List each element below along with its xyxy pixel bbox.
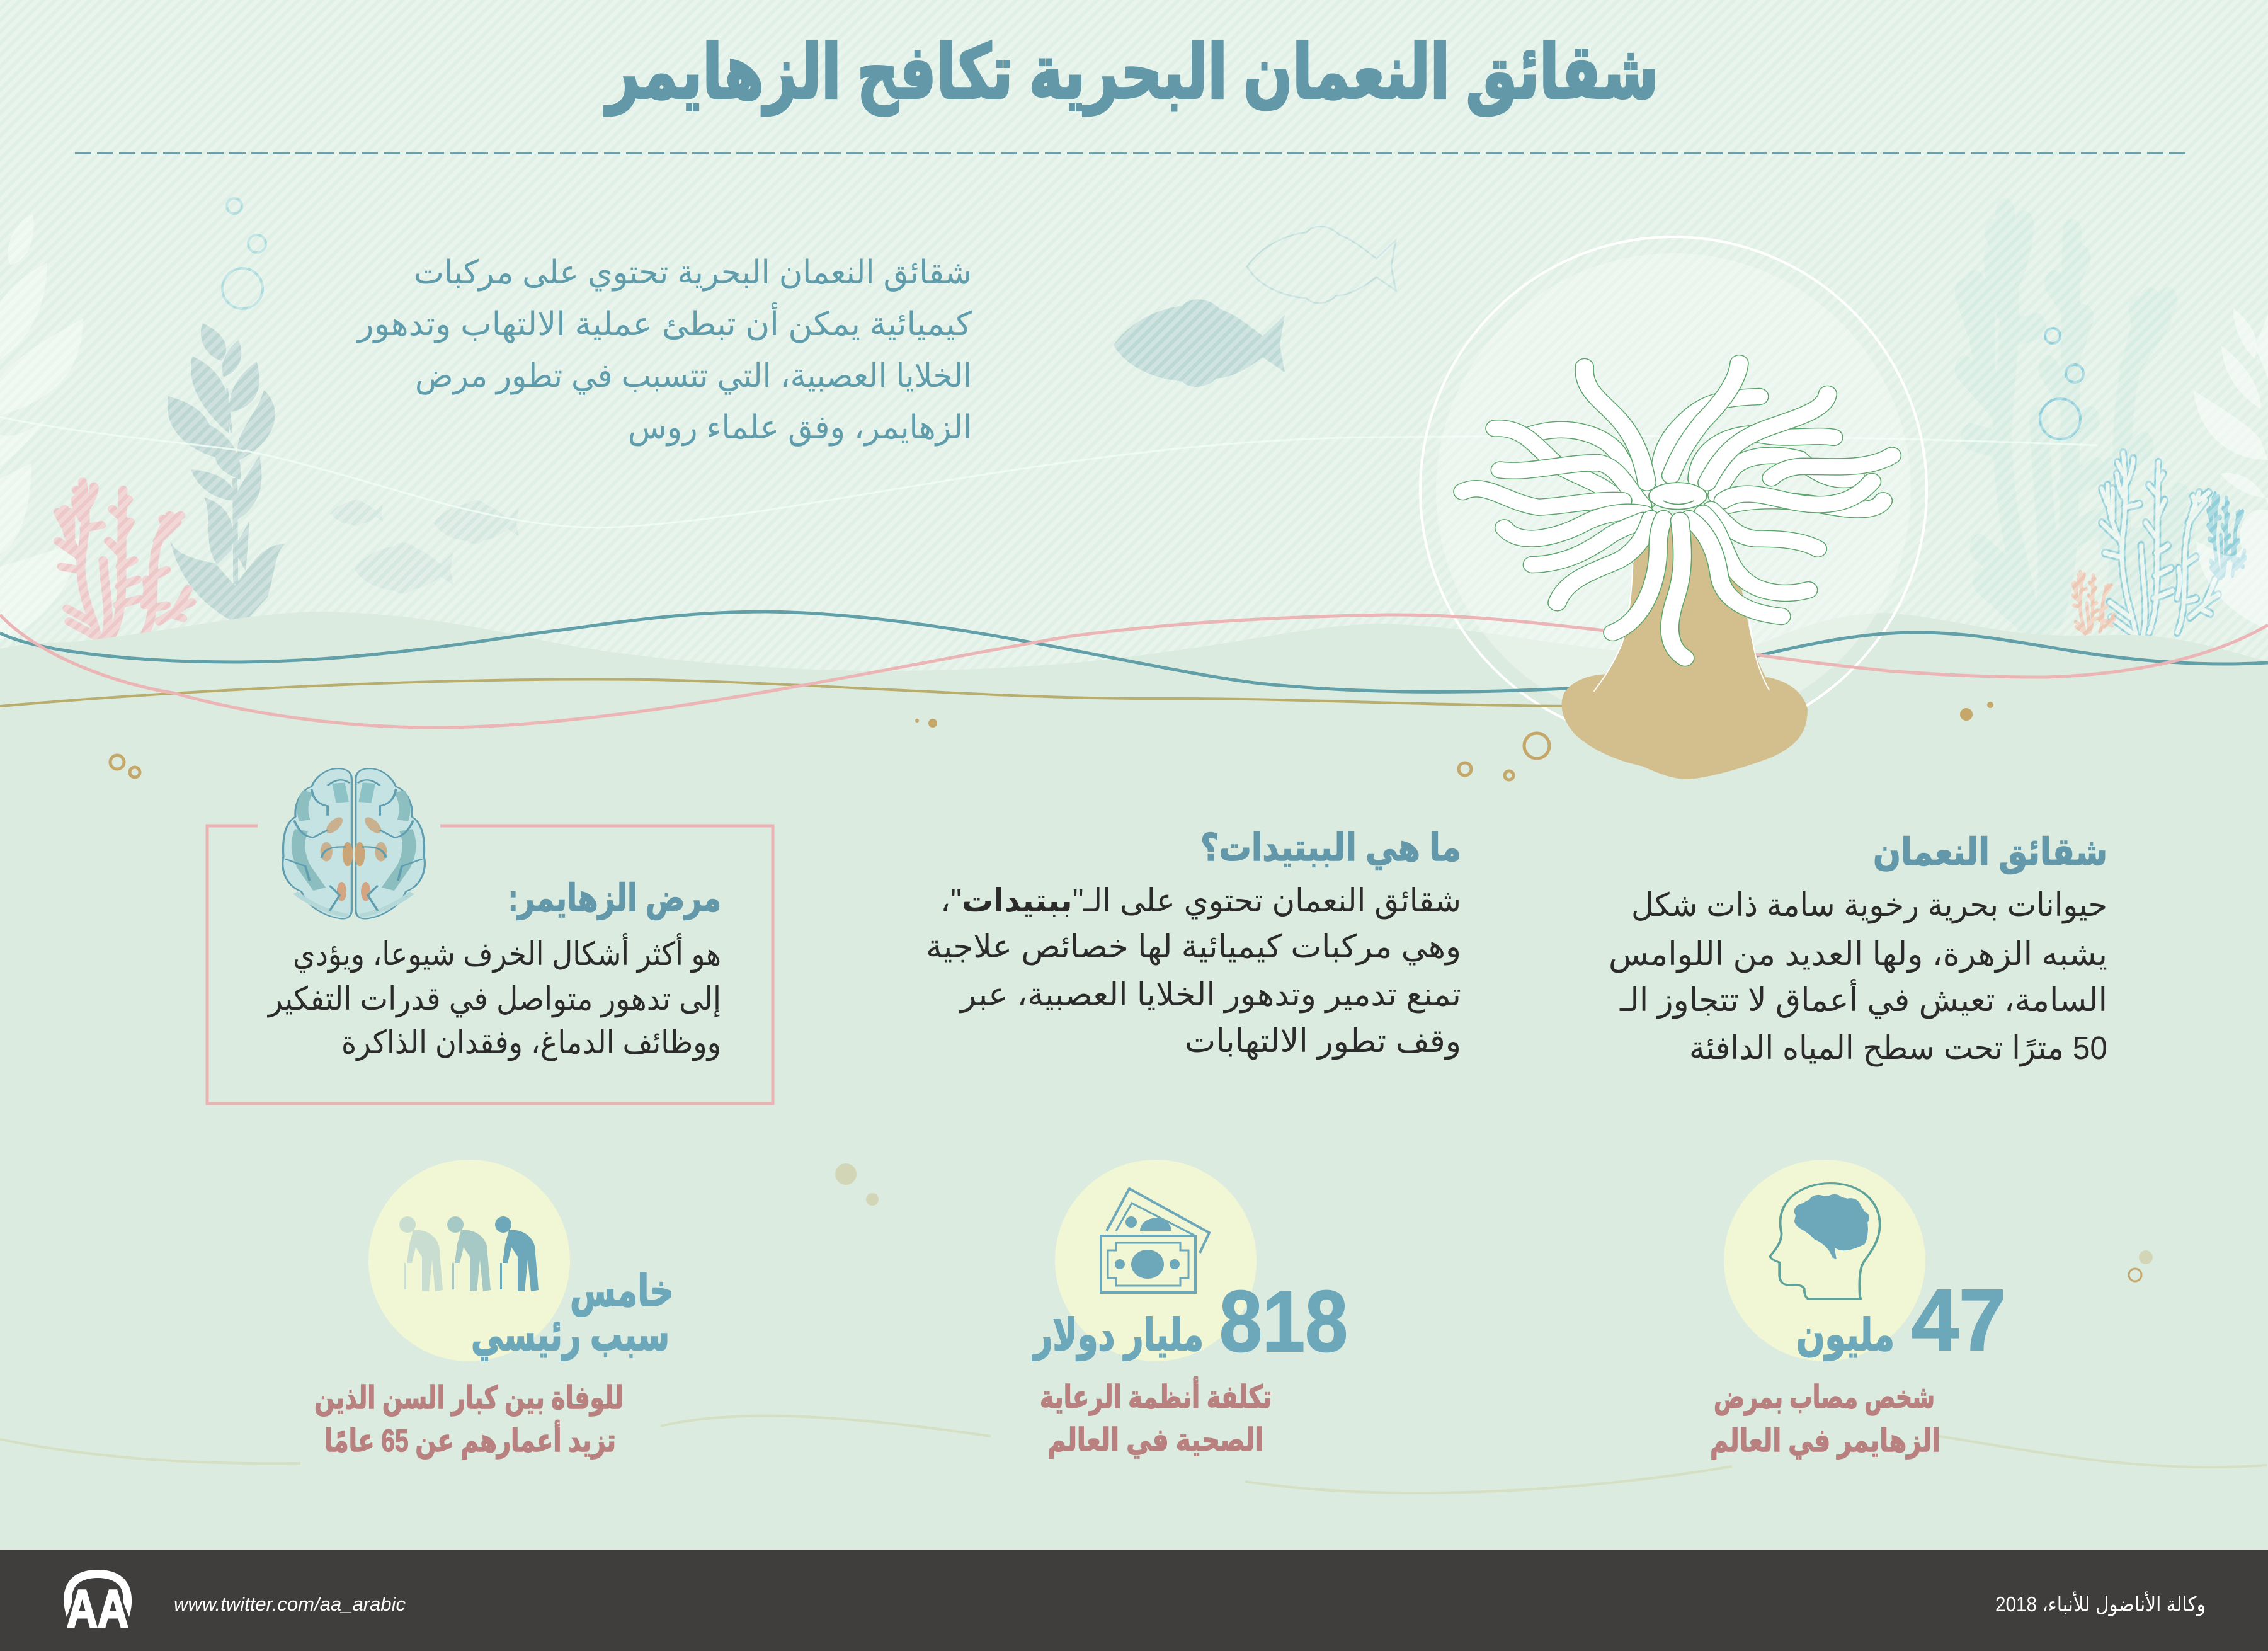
Alzheimer description: إلى تدهور متواصل في قدرات التفكير <box>266 981 721 1018</box>
bubbles left <box>222 198 266 309</box>
stat: 47 million: شخص مصاب بمرض <box>1714 1380 1935 1416</box>
coral salmon <box>2073 572 2115 634</box>
footer bar <box>0 1550 2268 1651</box>
stat: 818 billion dollars: مليار دولار <box>1032 1310 1204 1361</box>
icon: brain top view <box>283 768 425 919</box>
section: peptides: وقف تطور الالتهابات <box>1185 1023 1461 1060</box>
wave line olive <box>0 679 1581 706</box>
Alzheimer description: هو أكثر أشكال الخرف شيوعا، ويؤدي <box>293 933 721 973</box>
section: sea anemone description: حيوانات بحرية رخوية سامة ذات شكل <box>1631 887 2107 924</box>
stat: 47 million <box>1710 1272 2006 1460</box>
dashed divider <box>75 152 2189 154</box>
bubbles right <box>2040 328 2083 439</box>
gold decorative rings and dots <box>110 702 2153 1281</box>
section: sea anemone description: شقائق النعمان <box>1873 831 2107 874</box>
fish filled large <box>1114 299 1285 387</box>
stat: 47 million: الزهايمر في العالم <box>1710 1423 1940 1460</box>
stat: 818 billion dollars <box>1032 1273 1348 1458</box>
section: peptides: شقائق النعمان تحتوي على الـ"ببتيدات"، <box>940 883 1461 920</box>
stat: 47 million: مليون <box>1796 1310 1895 1361</box>
anemone mouth <box>1649 483 1707 510</box>
Alzheimer description: ووظائف الدماغ، وفقدان الذاكرة <box>341 1024 721 1061</box>
footer credit: وكالة الأناضول للأنباء، 2018 <box>1995 1591 2206 1616</box>
intro text: الخلايا العصبية، التي تتسبب في تطور مرض <box>415 358 972 395</box>
Alzheimer description <box>266 933 721 1061</box>
section: peptides: ما هي الببتيدات؟ <box>1200 826 1461 870</box>
stat: fifth leading cause: للوفاة بين كبار السن الذين <box>314 1380 624 1417</box>
section: sea anemone description: السامة، تعيش في أعماق لا تتجاوز الـ <box>1619 979 2107 1019</box>
faint curved lines <box>0 1416 2267 1493</box>
fish outline <box>1247 227 1396 303</box>
light wave line <box>0 417 2097 528</box>
stat: 818 billion dollars: الصحية في العالم <box>1047 1422 1263 1458</box>
anemone column and foot <box>1562 524 1808 779</box>
intro text: الزهايمر، وفق علماء روس <box>628 409 972 447</box>
bubble circle outline <box>1420 237 1927 743</box>
stat: 818 billion dollars: 818 <box>1219 1273 1348 1370</box>
panel: Alzheimer box <box>207 826 773 1104</box>
tentacles <box>1462 363 1892 658</box>
section: peptides: تمنع تدمير وتدهور الخلايا العصبية، عبر <box>959 976 1461 1014</box>
sand hills <box>0 612 2268 1651</box>
icon: elderly people <box>399 1216 539 1291</box>
stat: 818 billion dollars: تكلفة أنظمة الرعاية <box>1040 1376 1272 1416</box>
intro text: كيميائية يمكن أن تبطئ عملية الالتهاب وتدهور <box>356 302 972 343</box>
anemone <box>1462 363 1892 779</box>
bubble circle inner <box>1436 253 1911 728</box>
section: sea anemone description <box>1609 831 2107 1067</box>
section: sea anemone description: يشبه الزهرة، ولها العديد من اللوامس <box>1609 936 2107 973</box>
section: peptides: وهي مركبات كيميائية لها خصائص علاجية <box>926 928 1461 966</box>
title: شقائق النعمان البحرية تكافح الزهايمر <box>604 31 1659 116</box>
stat: 47 million: 47 <box>1912 1272 2006 1369</box>
heading: Alzheimer: مرض الزهايمر: <box>508 877 721 920</box>
intro text <box>356 254 972 447</box>
section: peptides <box>926 826 1461 1060</box>
seaweed silhouette faint right <box>1964 212 2185 628</box>
seaweed left <box>168 323 285 622</box>
intro text: شقائق النعمان البحرية تحتوي على مركبات <box>414 254 972 292</box>
stat: fifth leading cause: خامس <box>570 1266 674 1317</box>
circles behind stat icons <box>368 1160 1925 1361</box>
small fish school <box>331 500 519 593</box>
icon: head with brain <box>1770 1184 1880 1299</box>
footer twitter url: www.twitter.com/aa_arabic <box>174 1593 406 1615</box>
white translucent leaves left <box>0 214 83 639</box>
logo: AA: AA <box>67 1579 128 1638</box>
coral pink left <box>58 482 191 639</box>
wave line teal <box>0 612 2268 692</box>
icon: money bills <box>1101 1189 1209 1293</box>
section: sea anemone description: 50 مترًا تحت سطح المياه الدافئة <box>1689 1030 2107 1067</box>
coral teal small right <box>2208 494 2245 578</box>
diagonal stripes overlay <box>0 0 2268 756</box>
coral teal outline right <box>2102 453 2218 638</box>
background: water <box>0 0 2268 756</box>
stat: fifth leading cause <box>314 1266 674 1460</box>
wave line pink <box>0 615 2268 728</box>
stat: fifth leading cause: سبب رئيسي <box>471 1310 670 1361</box>
stat: fifth leading cause: تزيد أعمارهم عن 65 عامًا <box>324 1420 616 1460</box>
white translucent leaves right <box>2194 308 2268 630</box>
